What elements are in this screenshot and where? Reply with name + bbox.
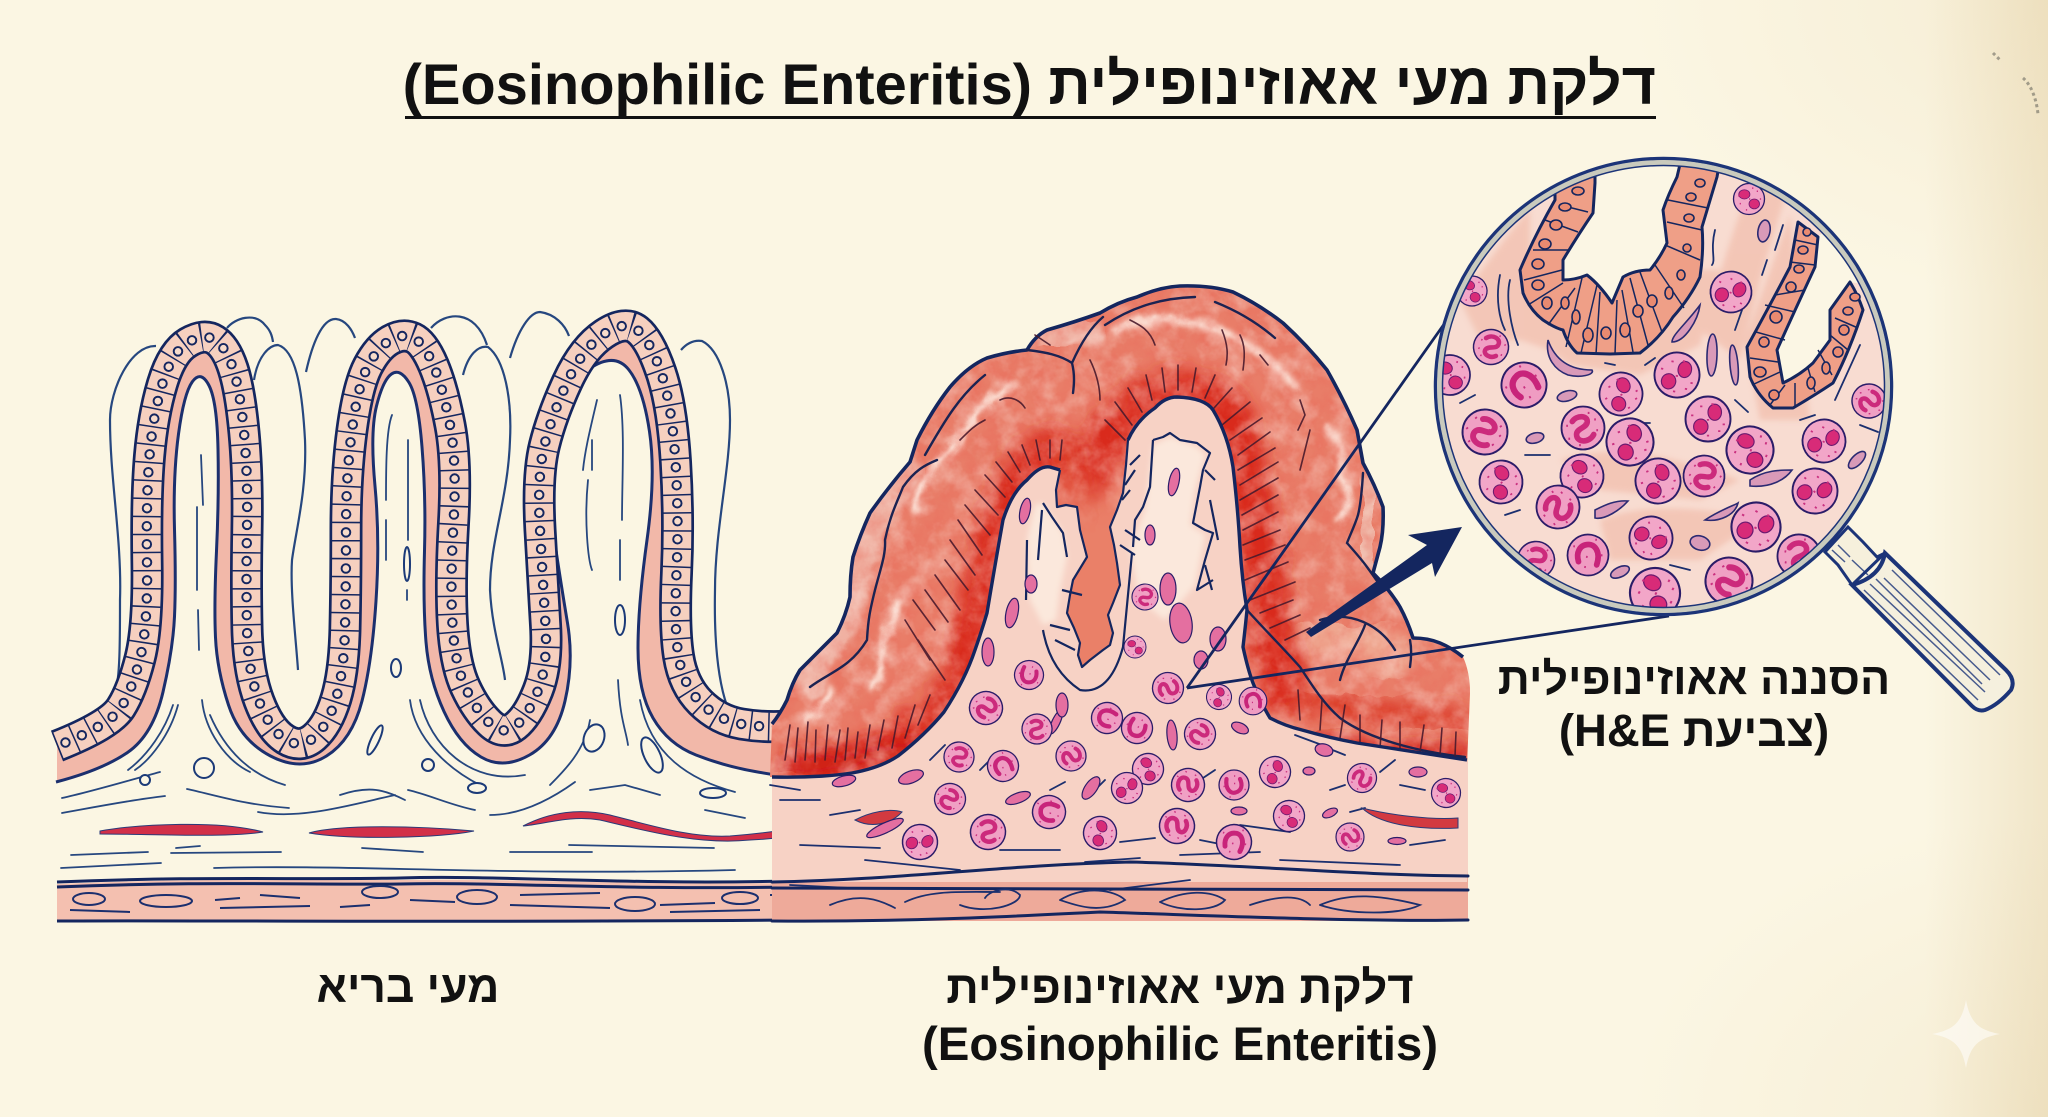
label: eosinophilic enteritis [922, 962, 1438, 1071]
jagged crypt lines [1026, 433, 1218, 690]
handle [1825, 527, 2013, 710]
panel: eosinophilic enteritis tissue [760, 270, 1490, 935]
lamina propria core [56, 360, 800, 810]
mass outer contour [772, 286, 1463, 724]
watercolor streaks [1460, 170, 1810, 560]
lower layer fine lines [770, 735, 1468, 921]
watermark sparkle [1932, 1000, 2000, 1068]
crypt cell walls [1524, 200, 1858, 408]
title: דלקת מעי אאוזינופילית (Eosinophilic Enteritis) [403, 51, 1656, 117]
mound contour [772, 397, 1467, 777]
pale crypt interiors [1027, 437, 1205, 625]
muscle layer [57, 877, 790, 921]
label: healthy intestine: מעי בריא [317, 963, 499, 1012]
background villi outlines [110, 312, 730, 706]
label: eosinophilic enteritis: דלקת מעי אאוזינופילית [946, 962, 1414, 1013]
small vessels and cell outlines [140, 547, 726, 798]
mucosa pink band [57, 326, 800, 800]
inflamed base layers [772, 758, 1468, 921]
vessels in the inflamed layer [855, 808, 1458, 828]
fibroblast spindles [831, 467, 1427, 844]
core contour line [56, 360, 800, 782]
epithelium cell layer [57, 326, 790, 746]
epithelial crypt bands [1520, 160, 1863, 408]
red tongue between lobes [1056, 465, 1126, 667]
crypt nuclei [1532, 179, 1860, 400]
red inflamed mucosa mass [760, 270, 1480, 780]
mucosa hatching [785, 320, 1456, 762]
mass inner fold lines [810, 297, 1465, 757]
paper specks [1993, 53, 2038, 114]
lens tissue [1440, 162, 1888, 610]
label: eosinophilic infiltration with H&E staining: (צביעת H&E) [1559, 705, 1829, 756]
eosinophils in lens [1427, 184, 1889, 627]
arrow [1306, 527, 1462, 637]
eosinophils in the tissue [895, 579, 1463, 867]
label: eosinophilic infiltration with H&E staining: הסננה אאוזינופילית [1498, 655, 1890, 704]
fibroblasts and strokes [1525, 219, 1868, 581]
panel: healthy intestine [56, 312, 866, 921]
lumen openings [1564, 166, 1678, 300]
lamina propria mound with two lobes [772, 397, 1467, 882]
core and submucosa fine lines [61, 395, 745, 872]
blood vessels [100, 806, 866, 841]
label: eosinophilic infiltration with H&E staining [1498, 655, 1890, 756]
lens rim [1436, 158, 1892, 614]
label: eosinophilic enteritis: (Eosinophilic Enteritis) [922, 1018, 1438, 1071]
magnifying glass [1427, 150, 2013, 710]
pointer lines to magnifier [1187, 320, 1669, 688]
